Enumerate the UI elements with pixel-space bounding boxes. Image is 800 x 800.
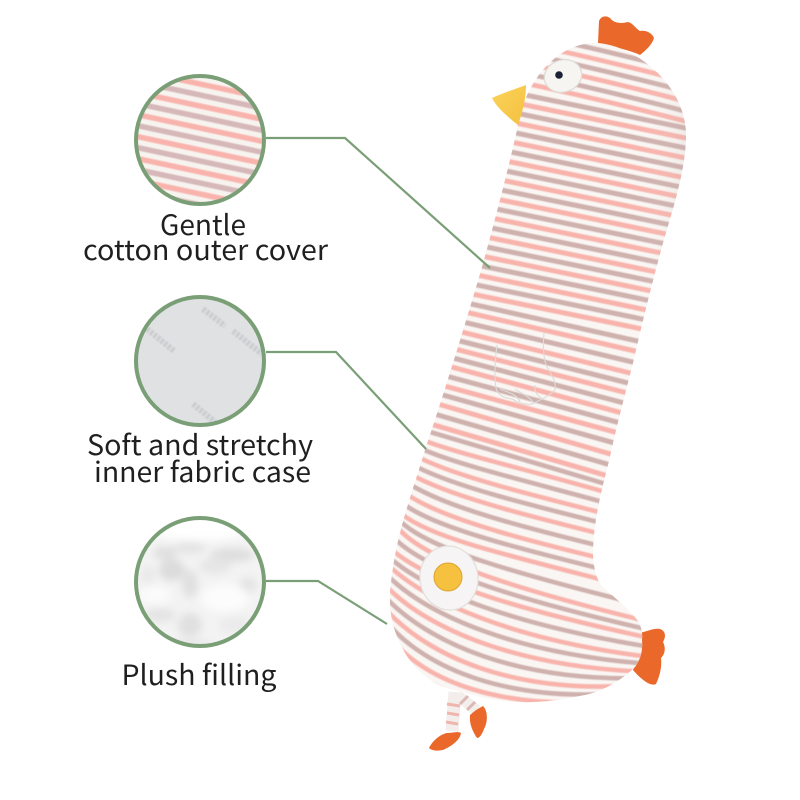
icon: legs xyxy=(446,692,477,731)
icon: beak xyxy=(492,85,526,125)
icon: feet xyxy=(429,706,487,751)
label: cotton outer cover: cotton outer cover xyxy=(83,229,328,269)
stripes: lower body xyxy=(386,429,650,710)
stripes: upper body xyxy=(432,92,686,478)
label: cotton outer cover: Gentle xyxy=(160,204,246,244)
label: plush filling: Plush filling xyxy=(122,654,277,694)
icon: fried egg patch xyxy=(416,542,482,614)
label: inner fabric case: Soft and stretchy xyxy=(87,424,313,464)
icon: eye xyxy=(540,55,586,97)
swatch: grey stretch fabric xyxy=(136,297,264,425)
infographic canvas xyxy=(84,16,686,751)
label: inner fabric case xyxy=(87,424,313,491)
pillow body xyxy=(390,43,686,702)
icon: comb xyxy=(598,16,654,55)
swatch: white filling xyxy=(136,512,264,650)
panel: plush filling xyxy=(122,512,277,694)
stripes: head xyxy=(531,44,685,124)
icon: embroidered foot xyxy=(495,333,555,404)
body shading xyxy=(678,114,686,184)
connector line: inner case xyxy=(266,352,426,449)
chicken pillow illustration xyxy=(380,0,700,751)
label: inner fabric case: inner fabric case xyxy=(94,451,311,491)
swatch: striped cotton xyxy=(134,74,266,206)
icon: tail xyxy=(633,629,665,685)
connector line: filling xyxy=(266,581,387,624)
label: cotton outer cover xyxy=(83,204,328,269)
panel: inner fabric case xyxy=(87,297,313,491)
connector line: cotton cover xyxy=(266,138,490,268)
panel: cotton outer cover xyxy=(84,74,328,260)
